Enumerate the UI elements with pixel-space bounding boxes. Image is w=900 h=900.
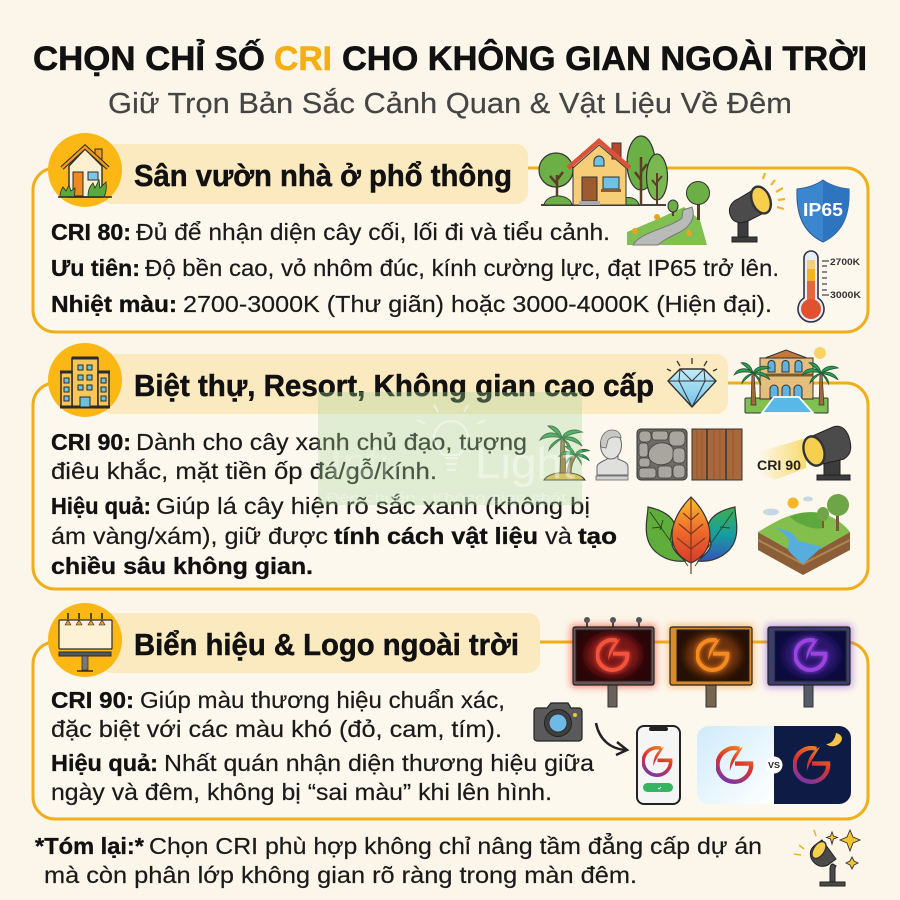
text: color temperature: Nhiệt màu: bbox=[51, 291, 177, 317]
text: effect: Hiệu quả: bbox=[51, 493, 151, 519]
heading bar: Biển hiệu & Logo ngoài trời bbox=[134, 627, 519, 662]
panel: outdoor signs and logos bbox=[33, 603, 868, 819]
text: effect: và bbox=[545, 523, 573, 549]
text: priority: Ưu tiên: bbox=[51, 255, 140, 281]
icon: red billboard bbox=[571, 617, 656, 707]
heading bar bbox=[100, 354, 728, 414]
icon: small spotlight with sparkles bbox=[794, 830, 860, 886]
text: sign effect: Hiệu quả: bbox=[51, 750, 158, 776]
text: sign effect: ngày và đêm, không bị “sai màu” khi lên hình. bbox=[51, 779, 552, 805]
text: effect: tính cách vật liệu bbox=[334, 523, 538, 549]
text: CRI 90 use bbox=[51, 429, 527, 484]
panel: villa and resort bbox=[33, 343, 868, 589]
watermark: Đèn chuẩn - Không gian chất bbox=[326, 490, 567, 505]
icon: day vs night comparison bbox=[697, 726, 851, 804]
icon: day vs night comparison: VS bbox=[768, 761, 781, 770]
icon: phone bbox=[637, 726, 680, 804]
icon: wood panel bbox=[692, 429, 742, 480]
text: CRI 90 sign: đặc biệt với các màu khó (đỏ, cam, tím). bbox=[51, 716, 502, 742]
icon: thermometer: 2700K bbox=[830, 257, 861, 267]
summary text bbox=[35, 831, 762, 888]
panel: residential garden bbox=[33, 133, 868, 332]
icon: diamond bbox=[667, 358, 717, 407]
text: CRI 90 use: CRI 90: bbox=[51, 429, 131, 455]
text: color temperature: 2700-3000K (Thư giãn) hoặc 3000-4000K (Hiện đại). bbox=[183, 291, 772, 317]
icon: thermometer bbox=[798, 251, 862, 322]
icon: spotlight bbox=[729, 173, 785, 242]
text: sign effect bbox=[51, 750, 595, 805]
icon: purple billboard bbox=[766, 625, 852, 707]
watermark bbox=[318, 392, 582, 505]
title bbox=[33, 39, 867, 78]
icon: CRI 90 spotlight: CRI 90 bbox=[757, 458, 801, 473]
text: priority: Độ bền cao, vỏ nhôm đúc, kính cường lực, đạt IP65 trở lên. bbox=[145, 255, 779, 281]
subtitle: Giữ Trọn Bản Sắc Cảnh Quan & Vật Liệu Về Đêm bbox=[108, 88, 792, 120]
text: effect: Giúp lá cây hiện rõ sắc xanh (không bị bbox=[156, 493, 590, 519]
icon: CRI 90 spotlight bbox=[757, 426, 851, 480]
heading bar bbox=[100, 144, 528, 204]
icon: billboard badge bbox=[48, 603, 122, 677]
arrow: camera to phone bbox=[596, 723, 627, 755]
icon: stone wall bbox=[637, 429, 687, 480]
text: effect: chiều sâu không gian. bbox=[51, 553, 313, 579]
title: CHỌN CHỈ SỐ bbox=[33, 39, 265, 78]
text: CRI 90 use: điêu khắc, mặt tiền ốp đá/gỗ/kính. bbox=[51, 458, 437, 484]
watermark: Light bbox=[475, 439, 575, 488]
summary text: mà còn phân lớp không gian rõ ràng trong màn đêm. bbox=[44, 862, 637, 888]
icon: house badge bbox=[48, 133, 122, 207]
text: effect: tạo bbox=[578, 523, 617, 549]
text: CRI 90 sign bbox=[51, 687, 505, 742]
text: effect: ám vàng/xám), giữ được bbox=[51, 523, 328, 549]
text: CRI 80: CRI 80: bbox=[51, 219, 131, 245]
text: CRI 90 sign: CRI 90: bbox=[51, 687, 134, 713]
heading bar bbox=[100, 613, 540, 673]
icon: IP65 shield: IP65 bbox=[803, 200, 843, 220]
icon: IP65 shield bbox=[797, 180, 849, 242]
icon: camera bbox=[534, 703, 582, 741]
summary text: Chọn CRI phù hợp không chỉ nâng tầm đẳng cấp dự án bbox=[149, 831, 762, 859]
text: CRI 80: Đủ để nhận diện cây cối, lối đi và tiểu cảnh. bbox=[136, 219, 610, 245]
icon: palm island bbox=[540, 426, 589, 480]
text: CRI 90 use: Dành cho cây xanh chủ đạo, tượng bbox=[136, 429, 527, 455]
title: CHO KHÔNG GIAN NGOÀI TRỜI bbox=[342, 39, 867, 78]
text: CRI 90 sign: Giúp màu thương hiệu chuẩn xác, bbox=[140, 687, 505, 713]
icon: landscape bbox=[758, 494, 850, 575]
text: sign effect: Nhất quán nhận diện thương hiệu giữa bbox=[164, 750, 595, 776]
icon: orange billboard bbox=[668, 625, 754, 707]
title: CRI bbox=[274, 40, 332, 78]
icon: villa bbox=[734, 347, 838, 413]
text: effect bbox=[51, 493, 617, 579]
heading bar: Sân vườn nhà ở phổ thông bbox=[134, 158, 512, 193]
icon: colorful leaves bbox=[646, 497, 737, 574]
icon: statue bust bbox=[596, 430, 628, 480]
watermark: Infi bbox=[330, 439, 389, 488]
icon: thermometer: 3000K bbox=[830, 290, 862, 300]
icon: garden path bbox=[627, 182, 710, 245]
heading bar: Biệt thự, Resort, Không gian cao cấp bbox=[134, 368, 654, 403]
summary text: *Tóm lại:* bbox=[35, 833, 145, 859]
icon: house with trees bbox=[539, 136, 668, 205]
icon: building badge bbox=[48, 343, 122, 417]
